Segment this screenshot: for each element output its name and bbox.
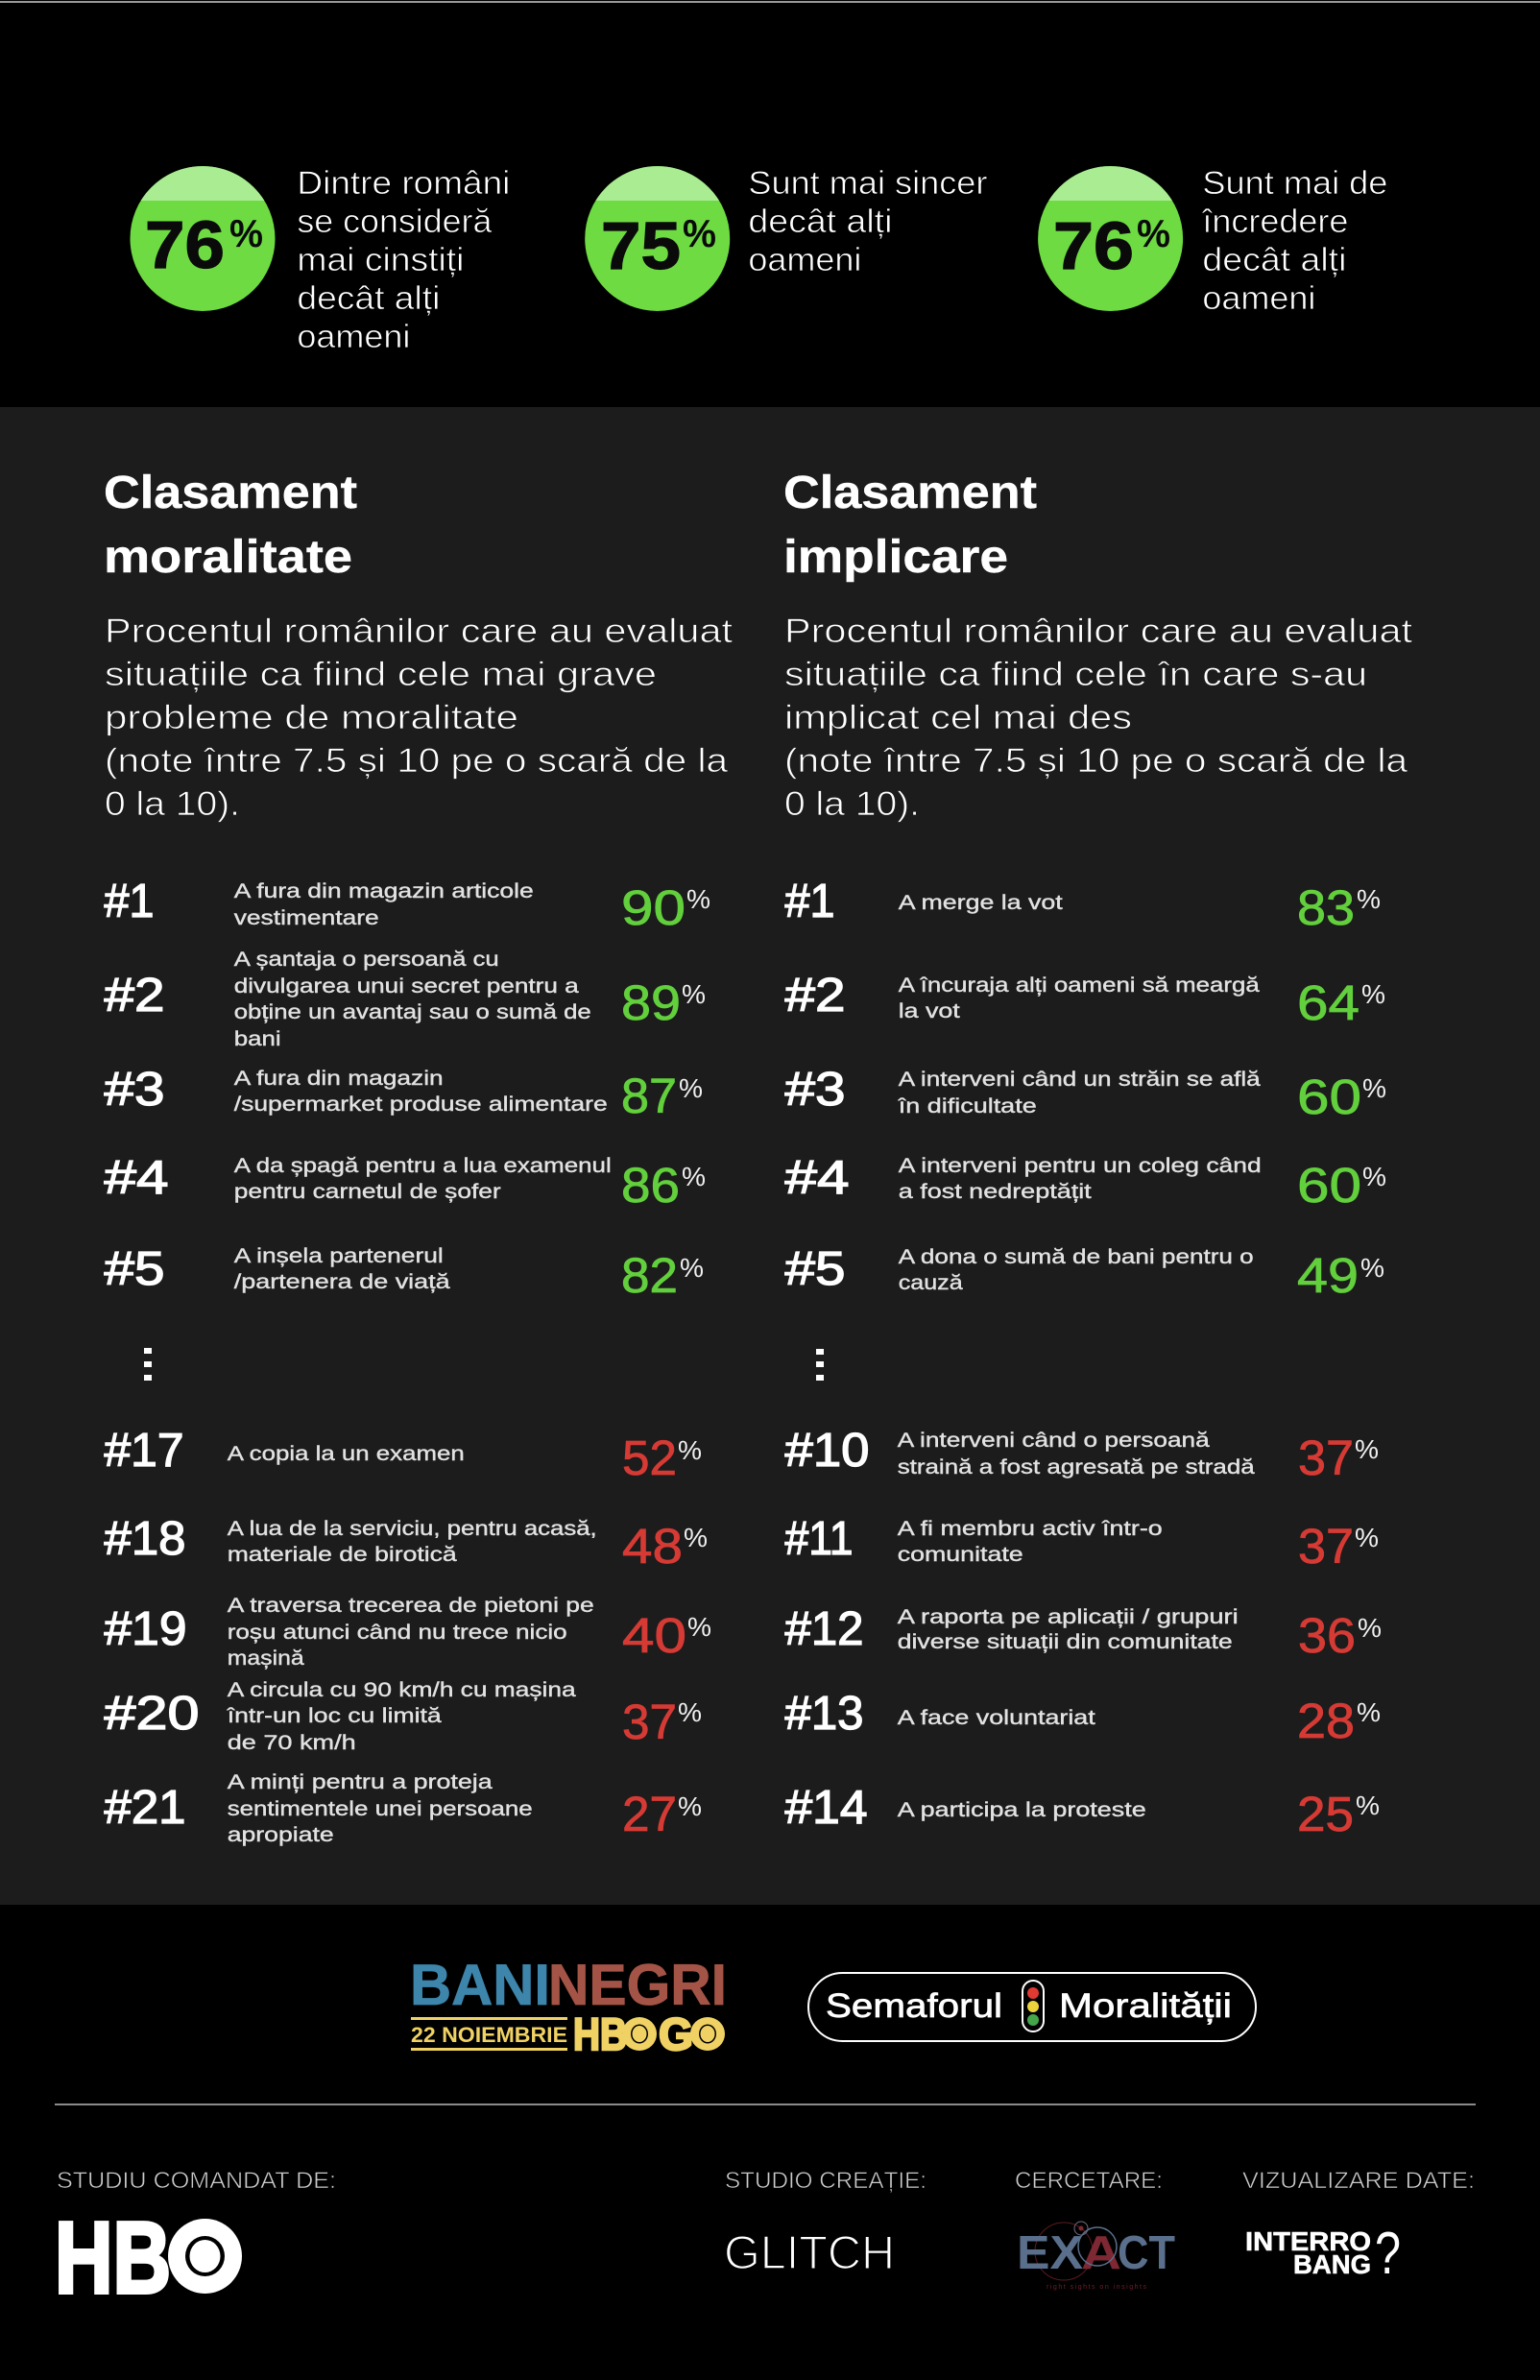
row: moralitate #19 xyxy=(104,1594,711,1670)
credit: Cercetare Exact: CERCETARE: xyxy=(1015,2168,1163,2194)
row: implicare #12: % xyxy=(1358,1613,1382,1643)
row: moralitate #20: într-un loc cu limită xyxy=(226,1704,442,1727)
credit: Vizualizare date Interrobang xyxy=(1242,2168,1475,2287)
row: moralitate #1: vestimentare xyxy=(234,906,379,929)
stat: 76% de încredere: oameni xyxy=(1202,280,1315,317)
heading: Clasament implicare: implicare xyxy=(783,532,1008,583)
credit: Studiu comandat de HBO: STUDIU COMANDAT DE: xyxy=(57,2168,336,2194)
logo: Interrobang: BANG xyxy=(1293,2249,1371,2279)
text: implicare description: 0 la 10). xyxy=(784,785,920,823)
logo: Bani Negri xyxy=(410,1953,727,2059)
logo: Interrobang xyxy=(1245,2221,1401,2287)
row: moralitate #19: #19 xyxy=(104,1603,186,1655)
row: implicare #3: 60 xyxy=(1297,1070,1361,1124)
row: moralitate #2: #2 xyxy=(104,970,165,1022)
row: implicare #5: % xyxy=(1360,1253,1384,1283)
stat: 76% de încredere: Sunt mai de xyxy=(1202,165,1387,202)
row: moralitate #3: A fura din magazin xyxy=(234,1067,444,1090)
row: implicare #11: comunitate xyxy=(898,1543,1023,1566)
text: moralitate description: 0 la 10). xyxy=(105,785,240,823)
row: implicare #11: 37 xyxy=(1298,1519,1354,1574)
row: implicare #1 xyxy=(785,876,1381,935)
row: moralitate #20: % xyxy=(678,1697,702,1727)
row: moralitate #21: % xyxy=(678,1791,702,1821)
logo: Semaforul Moralității: Semaforul xyxy=(826,1987,1002,2025)
row: moralitate #3: #3 xyxy=(104,1064,165,1116)
row: moralitate #18: #18 xyxy=(104,1513,186,1565)
row: moralitate #19: A traversa trecerea de pietoni pe xyxy=(228,1594,594,1617)
row: implicare #13: 28 xyxy=(1297,1694,1355,1748)
row: implicare #2: #2 xyxy=(785,970,845,1022)
row: implicare #10: straină a fost agresată pe stradă xyxy=(898,1455,1255,1478)
text: implicare description: implicat cel mai des xyxy=(784,699,1132,736)
row: moralitate #18: 48 xyxy=(622,1519,683,1574)
stat: 76% cinstiți: % xyxy=(229,211,263,255)
logo: Bani Negri: NEGRI xyxy=(548,1953,727,2017)
row: moralitate #20: #20 xyxy=(104,1688,200,1740)
row: moralitate #2: 89 xyxy=(621,975,681,1030)
stat: 76% cinstiți: mai cinstiți xyxy=(297,242,464,278)
logo: Interrobang: ? xyxy=(1375,2221,1401,2287)
row: moralitate #4 xyxy=(104,1152,706,1213)
logo: Exact: right sights on insights xyxy=(1047,2284,1146,2291)
credit: Studio creație Glitch xyxy=(724,2168,926,2279)
stat: 75% sinceri xyxy=(585,165,987,311)
text: implicare description: (note între 7.5 și 10 pe o scară de la xyxy=(784,742,1408,780)
stat: 76% cinstiți: decât alți xyxy=(297,280,440,317)
icon: vertical ellipsis xyxy=(144,1348,152,1381)
logo: Interrobang: INTERRO xyxy=(1245,2226,1371,2256)
logo: Semaforul Moralității xyxy=(808,1973,1256,2041)
row: implicare #10: #10 xyxy=(785,1425,870,1477)
row: implicare #2: la vot xyxy=(899,999,960,1022)
row: implicare #12: 36 xyxy=(1298,1608,1356,1663)
row: moralitate #19: mașină xyxy=(228,1647,304,1670)
row: implicare #5: cauză xyxy=(899,1271,963,1294)
row: implicare #5: 49 xyxy=(1297,1248,1359,1303)
stat: 76% cinstiți: 76 xyxy=(145,207,225,282)
credit: Studio creație Glitch: STUDIO CREAȚIE: xyxy=(725,2168,926,2194)
row: implicare #10 xyxy=(785,1425,1379,1485)
credit: Vizualizare date Interrobang: VIZUALIZARE DATE: xyxy=(1242,2168,1475,2194)
row: moralitate #3: % xyxy=(679,1073,703,1103)
stat: 76% de încredere: % xyxy=(1137,211,1170,255)
row: implicare #10: % xyxy=(1355,1434,1379,1464)
stat: 76% cinstiți xyxy=(131,165,510,355)
stat: 76% de încredere xyxy=(1038,165,1387,317)
stat: 76% de încredere: 76 xyxy=(1053,208,1134,283)
icon: vertical ellipsis xyxy=(816,1349,824,1381)
row: moralitate #17 xyxy=(104,1425,702,1485)
row: implicare #2 xyxy=(785,970,1385,1030)
row: implicare #2: % xyxy=(1361,979,1385,1009)
row: implicare #2: 64 xyxy=(1297,975,1360,1030)
logo: Bani Negri: HB xyxy=(573,2008,627,2059)
logo: Bani Negri: 22 NOIEMBRIE xyxy=(411,2023,567,2047)
row: implicare #5: #5 xyxy=(785,1243,845,1295)
row: implicare #10: A interveni când o persoană xyxy=(898,1429,1210,1452)
row: implicare #14: % xyxy=(1356,1791,1380,1820)
row: moralitate #17: 52 xyxy=(622,1430,677,1485)
logo: HBO: HB xyxy=(55,2201,171,2315)
text: moralitate description: (note între 7.5 și 10 pe o scară de la xyxy=(105,742,729,780)
heading: Clasament moralitate: Clasament xyxy=(104,468,357,518)
row: moralitate #4: #4 xyxy=(104,1152,169,1204)
row: implicare #1: #1 xyxy=(785,876,835,927)
row: moralitate #18 xyxy=(104,1513,708,1574)
row: implicare #2: A încuraja alți oameni să meargă xyxy=(899,974,1260,997)
row: moralitate #2: bani xyxy=(234,1027,281,1050)
row: moralitate #3: /supermarket produse alimentare xyxy=(234,1093,608,1116)
row: moralitate #1: 90 xyxy=(621,880,686,935)
row: moralitate #2: divulgarea unui secret pentru a xyxy=(234,974,579,998)
logo: Exact: EX xyxy=(1017,2227,1083,2279)
heading: Clasament moralitate xyxy=(104,468,357,583)
logo: Glitch: GLITCH xyxy=(724,2227,895,2279)
row: moralitate #1: #1 xyxy=(104,876,154,927)
row: implicare #14: 25 xyxy=(1297,1787,1354,1841)
column: Clasament moralitate xyxy=(104,468,733,1846)
row: moralitate #20: A circula cu 90 km/h cu mașina xyxy=(228,1678,576,1701)
text: moralitate description: Procentul românilor care au evaluat xyxy=(105,613,733,650)
row: moralitate #21: 27 xyxy=(622,1787,677,1841)
row: implicare #10: 37 xyxy=(1298,1430,1354,1485)
row: moralitate #5: 82 xyxy=(621,1248,678,1303)
stat: 76% de încredere: încredere xyxy=(1201,204,1348,240)
row: moralitate #17: A copia la un examen xyxy=(228,1442,465,1465)
stat: 75% sinceri: oameni xyxy=(748,242,861,278)
row: moralitate #1: A fura din magazin articole xyxy=(234,879,534,902)
row: moralitate #3: 87 xyxy=(621,1069,677,1123)
row: implicare #3: în dificultate xyxy=(897,1094,1037,1118)
row: implicare #3 xyxy=(785,1064,1386,1124)
panel: headline statistics xyxy=(131,165,1387,355)
row: moralitate #4: 86 xyxy=(621,1158,680,1213)
row: moralitate #5 xyxy=(104,1243,704,1303)
column: Clasament implicare xyxy=(783,468,1412,1841)
row: moralitate #18: % xyxy=(684,1523,708,1552)
logo: Exact: A xyxy=(1081,2227,1121,2279)
stat: 75% sinceri: Sunt mai sincer xyxy=(748,165,987,202)
row: moralitate #18: A lua de la serviciu, pentru acasă, xyxy=(228,1517,597,1540)
row: moralitate #2 xyxy=(104,948,706,1050)
stat: 75% sinceri: decât alți xyxy=(748,204,892,240)
row: implicare #5: A dona o sumă de bani pentru o xyxy=(899,1245,1254,1268)
logo: Exact: CT xyxy=(1118,2227,1175,2279)
row: implicare #12: A raporta pe aplicații / grupuri xyxy=(898,1605,1239,1628)
logo: Bani Negri: BANI xyxy=(410,1953,550,2017)
row: moralitate #5: % xyxy=(680,1253,704,1283)
row: implicare #1: 83 xyxy=(1297,880,1355,935)
row: implicare #1: % xyxy=(1357,884,1381,914)
row: implicare #3: #3 xyxy=(785,1064,845,1116)
row: moralitate #20: de 70 km/h xyxy=(228,1731,356,1754)
row: moralitate #19: roșu atunci când nu trece nicio xyxy=(228,1621,567,1644)
row: implicare #4: a fost nedreptățit xyxy=(899,1180,1092,1203)
stat: 76% cinstiți: se consideră xyxy=(297,204,492,240)
text: implicare description xyxy=(784,613,1412,823)
row: moralitate #1: % xyxy=(686,884,710,914)
row: moralitate #5: #5 xyxy=(104,1243,165,1295)
row: implicare #14: A participa la proteste xyxy=(898,1798,1146,1821)
row: moralitate #17: % xyxy=(678,1435,702,1465)
stat: 75% sinceri: % xyxy=(683,211,716,255)
row: moralitate #21: A minți pentru a proteja xyxy=(228,1770,493,1793)
text: implicare description: situațiile ca fiind cele în care s-au xyxy=(784,656,1367,693)
row: implicare #11: % xyxy=(1355,1523,1379,1552)
logo: Exact xyxy=(1017,2222,1175,2291)
logo: Semaforul Moralității: Moralității xyxy=(1059,1987,1232,2025)
row: moralitate #19: % xyxy=(687,1612,711,1642)
row: moralitate #5: /partenera de viață xyxy=(234,1270,450,1293)
row: implicare #4: #4 xyxy=(785,1152,849,1204)
row: moralitate #2: A șantaja o persoană cu xyxy=(234,948,499,971)
row: implicare #12 xyxy=(785,1603,1382,1663)
row: moralitate #20 xyxy=(104,1678,702,1754)
heading: Clasament implicare: Clasament xyxy=(783,468,1037,518)
row: implicare #1: A merge la vot xyxy=(899,891,1063,914)
row: implicare #14 xyxy=(785,1782,1380,1841)
row: implicare #4: 60 xyxy=(1297,1158,1361,1213)
credit: Cercetare Exact xyxy=(1015,2168,1175,2291)
stat: 75% sinceri: 75 xyxy=(601,208,681,283)
row: implicare #13: A face voluntariat xyxy=(898,1706,1095,1729)
row: moralitate #18: materiale de birotică xyxy=(228,1543,457,1566)
row: moralitate #2: % xyxy=(682,979,706,1009)
panel: rankings xyxy=(0,407,1540,1905)
row: implicare #13: % xyxy=(1357,1697,1381,1727)
row: implicare #3: % xyxy=(1362,1073,1386,1103)
row: moralitate #17: #17 xyxy=(104,1425,184,1477)
row: implicare #4 xyxy=(785,1152,1386,1213)
row: moralitate #19: 40 xyxy=(622,1608,686,1663)
text: moralitate description xyxy=(105,613,733,823)
row: implicare #13 xyxy=(785,1688,1381,1748)
icon: traffic light xyxy=(1023,1981,1044,2031)
row: moralitate #1 xyxy=(104,876,710,935)
row: moralitate #21: #21 xyxy=(104,1782,186,1834)
row: moralitate #4: % xyxy=(682,1162,706,1191)
row: moralitate #2: obține un avantaj sau o sumă de xyxy=(234,1000,591,1023)
row: moralitate #3 xyxy=(104,1064,703,1123)
row: implicare #12: diverse situații din comunitate xyxy=(898,1630,1233,1653)
row: moralitate #20: 37 xyxy=(622,1695,677,1749)
heading: Clasament moralitate: moralitate xyxy=(104,532,352,583)
row: implicare #4: A interveni pentru un coleg când xyxy=(899,1154,1262,1177)
row: implicare #5 xyxy=(785,1243,1384,1303)
row: implicare #13: #13 xyxy=(785,1688,864,1740)
row: moralitate #21 xyxy=(104,1770,702,1846)
row: implicare #4: % xyxy=(1362,1162,1386,1191)
row: implicare #12: #12 xyxy=(785,1603,864,1655)
row: implicare #14: #14 xyxy=(785,1782,868,1834)
text: moralitate description: situațiile ca fiind cele mai grave xyxy=(105,656,657,693)
logo: Bani Negri: G xyxy=(659,2008,693,2059)
row: moralitate #5: A inșela partenerul xyxy=(234,1244,444,1267)
row: implicare #11: A fi membru activ într-o xyxy=(898,1517,1163,1540)
text: implicare description: Procentul românilor care au evaluat xyxy=(784,613,1412,650)
row: moralitate #21: apropiate xyxy=(228,1823,334,1846)
stat: 76% de încredere: decât alți xyxy=(1202,242,1346,278)
stat: 76% cinstiți: Dintre români xyxy=(297,165,510,202)
heading: Clasament implicare xyxy=(783,468,1037,583)
row: moralitate #21: sentimentele unei persoane xyxy=(228,1797,533,1820)
row: moralitate #4: pentru carnetul de șofer xyxy=(234,1180,501,1203)
row: implicare #3: A interveni când un străin se află xyxy=(899,1068,1261,1091)
row: implicare #11 xyxy=(785,1513,1379,1574)
credit: Studiu comandat de HBO xyxy=(55,2168,336,2315)
text: moralitate description: probleme de moralitate xyxy=(105,699,518,736)
stat: 76% cinstiți: oameni xyxy=(297,319,410,355)
row: implicare #11: #11 xyxy=(785,1513,853,1565)
row: moralitate #4: A da șpagă pentru a lua examenul xyxy=(234,1154,612,1177)
